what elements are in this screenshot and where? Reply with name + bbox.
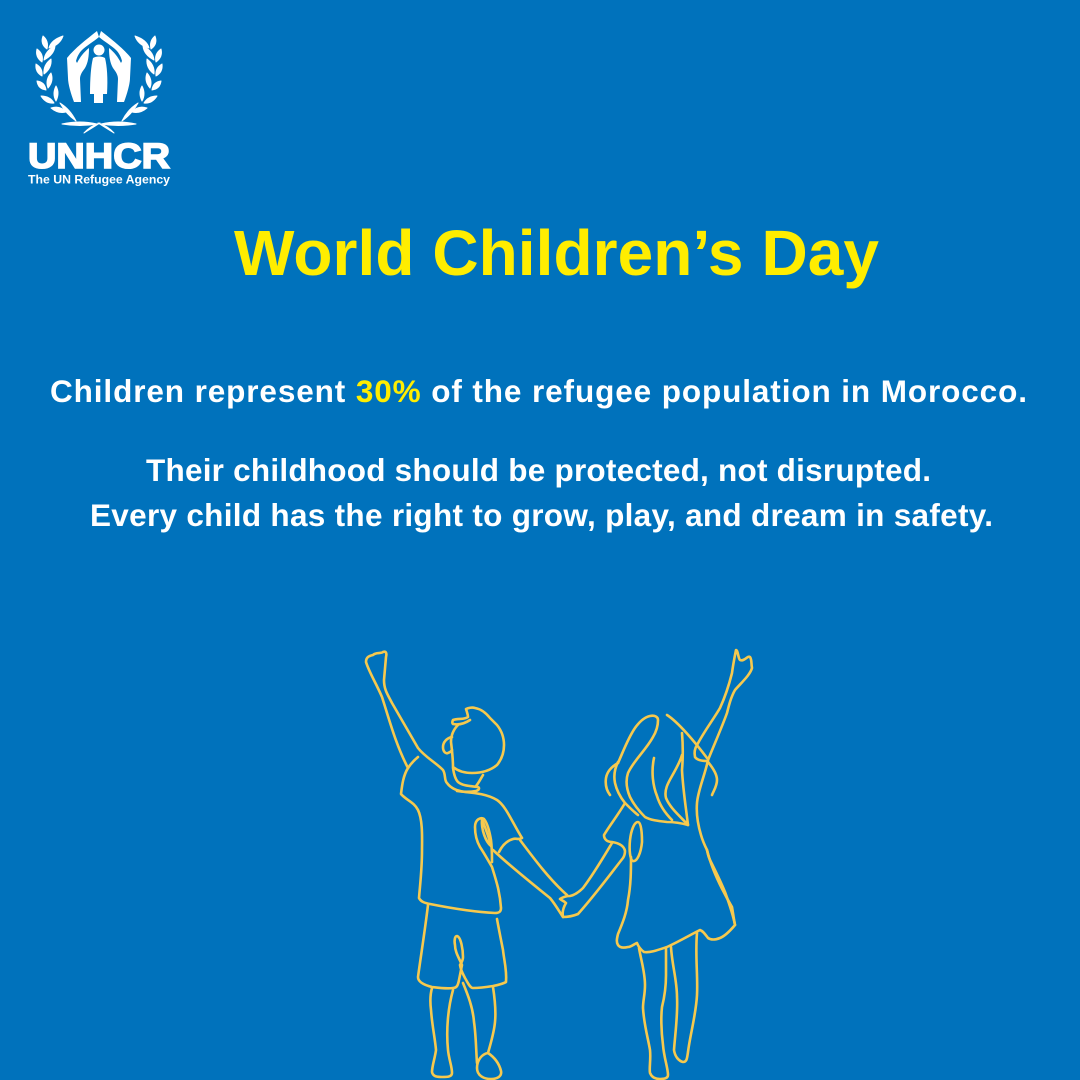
girl left leg (639, 948, 668, 1079)
illustration: two children holding hands (366, 650, 752, 1079)
icon: sheltering hands and person (67, 31, 131, 103)
boy figure (366, 652, 567, 1079)
boy holding arm (493, 840, 567, 917)
girl sleeve and holding arm (560, 803, 625, 917)
girl figure (560, 650, 752, 1079)
icon: laurel wreath (36, 36, 162, 133)
message line 1: Their childhood should be protected, not disrupted. (146, 452, 931, 488)
statistic sentence: Children represent 30% of the refugee population in Morocco. (50, 373, 1027, 409)
boy raised arm and shoulder (366, 652, 522, 852)
girl sleeve loop (630, 822, 642, 861)
girl hair lock (618, 716, 688, 825)
logo tagline: The UN Refugee Agency (28, 174, 171, 186)
boy inner arm loop (482, 819, 491, 846)
message line 2: Every child has the right to grow, play, and dream in safety. (90, 497, 993, 533)
girl side (617, 760, 735, 952)
boy neck and collar (453, 768, 483, 792)
boy right leg (463, 983, 495, 1063)
girl right leg (671, 933, 697, 1062)
girl right hair flick (708, 762, 717, 795)
logo wordmark: UNHCR (28, 137, 170, 176)
boy head and hair (451, 708, 504, 773)
title: World Children’s Day (234, 217, 879, 289)
girl dress fold (707, 850, 735, 925)
logo: UNHCR (28, 31, 171, 186)
girl left hair strands (606, 762, 638, 815)
boy sleeve and side (401, 757, 501, 913)
boy ear (443, 737, 452, 753)
boy foot (477, 1053, 501, 1079)
boy left leg (430, 988, 453, 1077)
girl middle strand (653, 758, 672, 820)
girl hair line and arm crease (667, 715, 707, 761)
girl raised arm (697, 650, 752, 760)
boy shorts (418, 905, 506, 988)
girl right hair strands (665, 733, 688, 825)
